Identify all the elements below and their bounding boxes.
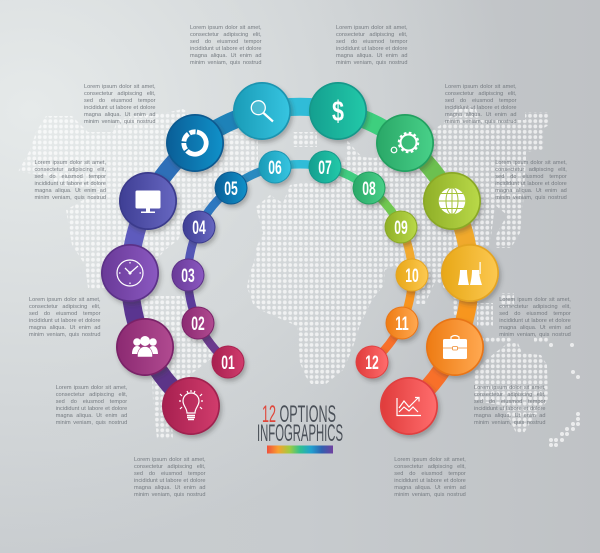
text block: lower left: magna aliqua. Ut enim ad (29, 325, 100, 331)
text block: top right: Lorem ipsum dolor sit amet, (336, 25, 408, 31)
text block: middle right: consectetur adipiscing elit, (495, 167, 567, 173)
map: Eurasia and Africa (247, 106, 549, 384)
text block: lower right: magna aliqua. Ut enim ad (499, 325, 571, 331)
text block: bottom right inner: incididunt ut labore et dolore (474, 406, 546, 412)
text block: lower left: consectetur adipiscing elit, (29, 304, 100, 310)
node: monitor (119, 172, 177, 230)
icon: dollar sign: $ (332, 96, 344, 128)
number node 05 (214, 172, 248, 204)
text block: top right: magna aliqua. Ut enim ad (336, 53, 408, 59)
text block: upper right: incididunt ut labore et dolore (445, 105, 516, 111)
text block: upper left: consectetur adipiscing elit, (84, 91, 156, 97)
map: South America (143, 296, 212, 439)
text block: upper right (445, 84, 516, 125)
text block: upper right: Lorem ipsum dolor sit amet, (445, 84, 516, 90)
text block: upper right: consectetur adipiscing elit, (445, 91, 516, 97)
text block: bottom right: magna aliqua. Ut enim ad (394, 484, 466, 490)
dotted world map (18, 106, 580, 447)
node: globe (423, 172, 481, 230)
text block: upper left (84, 84, 156, 125)
outer ring connectors (130, 107, 470, 406)
number node 06 (258, 150, 292, 184)
text block: middle right: incididunt ut labore et dolore (495, 181, 567, 187)
number node 09: 09 (394, 217, 408, 239)
map: New Zealand and small islands (549, 343, 580, 447)
number node 10 (396, 258, 428, 292)
text block: lower right: Lorem ipsum dolor sit amet, (499, 297, 571, 303)
node: line chart (380, 377, 438, 435)
text block: lower right (499, 297, 571, 338)
text block: middle left: magna aliqua. Ut enim ad (34, 188, 106, 194)
text block: bottom left inner: magna aliqua. Ut enim ad (56, 413, 127, 419)
icon: line chart (397, 398, 421, 416)
text block: top left: Lorem ipsum dolor sit amet, (190, 25, 262, 31)
number node 08: 08 (362, 178, 376, 200)
number node 07 (308, 150, 342, 184)
text block: top right: minim veniam, quis nostrud (336, 60, 408, 66)
text block: middle left: incididunt ut labore et dolore (34, 181, 106, 187)
text block: bottom left: sed do eiusmod tempor (134, 470, 206, 476)
text block: bottom left: minim veniam, quis nostrud (134, 492, 206, 498)
node: clock (101, 244, 159, 302)
text block: bottom left: consectetur adipiscing elit, (134, 464, 206, 470)
text block: bottom right inner: consectetur adipiscing elit, (474, 392, 546, 398)
text block: bottom right inner: magna aliqua. Ut enim ad (474, 413, 546, 419)
number node 02: 02 (191, 313, 205, 335)
text block: middle left: minim veniam, quis nostrud (34, 195, 106, 201)
text block: bottom left inner: consectetur adipiscing elit, (56, 392, 127, 398)
map: North America (18, 109, 258, 290)
icon: clock (117, 260, 143, 286)
text block: middle right: magna aliqua. Ut enim ad (495, 188, 567, 194)
text block: top right (336, 25, 408, 66)
number node 03 (172, 258, 204, 292)
number node 02 (182, 306, 214, 340)
icon: gears (391, 133, 418, 153)
text block: middle right: sed do eiusmod tempor (495, 174, 567, 180)
text block: top left: magna aliqua. Ut enim ad (190, 53, 262, 59)
number node 03: 03 (181, 265, 195, 287)
text block: bottom left: incididunt ut labore et dolore (134, 478, 206, 484)
title line: 12 OPTIONS: 12 OPTIONS (262, 401, 336, 428)
number node 11 (386, 306, 418, 340)
number node 01: 01 (221, 352, 235, 374)
text block: bottom left (134, 456, 206, 498)
text block: bottom right: incididunt ut labore et dolore (394, 478, 466, 484)
text block: lower right: consectetur adipiscing elit, (499, 304, 571, 310)
number node 12: 12 (365, 352, 379, 374)
text block: lower left: sed do eiusmod tempor (29, 311, 100, 317)
text block: bottom left inner: incididunt ut labore et dolore (56, 406, 127, 412)
text block: lower left (29, 297, 100, 338)
text block: middle right: Lorem ipsum dolor sit amet, (495, 160, 567, 166)
text block: top right: consectetur adipiscing elit, (336, 32, 408, 38)
text block: bottom right inner (474, 385, 546, 426)
text block: top left: sed do eiusmod tempor (190, 39, 262, 45)
title (257, 401, 343, 447)
icon: briefcase (443, 336, 467, 359)
node: briefcase (426, 318, 484, 376)
number node 12 (356, 346, 388, 378)
text block: bottom right: consectetur adipiscing elit, (394, 464, 466, 470)
node: light bulb (162, 377, 220, 435)
text block: top left (190, 25, 262, 66)
text block: upper left: magna aliqua. Ut enim ad (84, 112, 156, 118)
text block: upper right: magna aliqua. Ut enim ad (445, 112, 516, 118)
text block: top left: minim veniam, quis nostrud (190, 60, 262, 66)
icon: magnifier (251, 101, 273, 122)
number node 08 (352, 172, 386, 204)
text block: lower left: minim veniam, quis nostrud (29, 332, 100, 338)
text block: top left: incididunt ut labore et dolore (190, 46, 262, 52)
node: donut chart (166, 114, 224, 172)
number node 10: 10 (405, 265, 419, 287)
text block: bottom left inner (56, 385, 127, 426)
text block: middle left: consectetur adipiscing elit, (34, 167, 106, 173)
node: factory (441, 244, 499, 302)
inner ring connectors (188, 164, 412, 362)
text block: bottom right: Lorem ipsum dolor sit amet, (394, 456, 466, 462)
number node 09 (384, 210, 418, 244)
icon: people (132, 336, 158, 357)
text block: middle right (495, 160, 567, 201)
text block: bottom left inner: minim veniam, quis nostrud (56, 420, 127, 426)
number node 07: 07 (318, 157, 332, 179)
text block: bottom left inner: sed do eiusmod tempor (56, 399, 127, 405)
text: INFOGRAPHICS (257, 420, 343, 447)
text block: bottom right (394, 456, 466, 498)
map: Australia (474, 343, 548, 433)
node: gears (376, 114, 434, 172)
text block: bottom right inner: sed do eiusmod tempor (474, 399, 546, 405)
text block: middle right: minim veniam, quis nostrud (495, 195, 567, 201)
text block: bottom right: sed do eiusmod tempor (394, 470, 466, 476)
text block: bottom right inner: Lorem ipsum dolor sit amet, (474, 385, 546, 391)
text block: top right: sed do eiusmod tempor (336, 39, 408, 45)
node: magnifier (233, 82, 291, 140)
icon: donut chart (181, 129, 209, 157)
text block: upper left: minim veniam, quis nostrud (84, 119, 156, 125)
text block: upper right: sed do eiusmod tempor (445, 98, 516, 104)
icon: monitor (136, 190, 160, 213)
text block: bottom right inner: minim veniam, quis nostrud (474, 420, 546, 426)
number node 01 (212, 346, 244, 378)
text block: bottom left: magna aliqua. Ut enim ad (134, 484, 206, 490)
number node 04 (182, 210, 216, 244)
text block: upper left: Lorem ipsum dolor sit amet, (84, 84, 156, 90)
number node 05: 05 (224, 178, 238, 200)
text block: bottom left: Lorem ipsum dolor sit amet, (134, 456, 206, 462)
text block: upper left: incididunt ut labore et dolore (84, 105, 156, 111)
text block: upper right: minim veniam, quis nostrud (445, 119, 516, 125)
map: northern island (293, 132, 317, 147)
node: people (116, 318, 174, 376)
number node 06: 06 (268, 157, 282, 179)
text block: lower right: incididunt ut labore et dolore (499, 318, 571, 324)
map: south-east Asia islands (477, 303, 493, 326)
icon: light bulb (179, 390, 203, 420)
text block: lower left: incididunt ut labore et dolore (29, 318, 100, 324)
node: dollar (309, 82, 367, 140)
text block: bottom left inner: Lorem ipsum dolor sit amet, (56, 385, 127, 391)
text block: middle left: sed do eiusmod tempor (34, 174, 106, 180)
number node 11: 11 (395, 313, 409, 335)
text block: upper left: sed do eiusmod tempor (84, 98, 156, 104)
text block: middle left (34, 160, 106, 201)
text block: lower right: minim veniam, quis nostrud (499, 332, 571, 338)
text block: bottom right: minim veniam, quis nostrud (394, 492, 466, 498)
icon: factory (458, 262, 482, 285)
icon: globe (439, 188, 465, 214)
text block: middle left: Lorem ipsum dolor sit amet, (34, 160, 106, 166)
rainbow bar (267, 446, 333, 454)
text block: top left: consectetur adipiscing elit, (190, 32, 262, 38)
text block: top right: incididunt ut labore et dolore (336, 46, 408, 52)
number node 04: 04 (192, 217, 206, 239)
text block: lower right: sed do eiusmod tempor (499, 311, 571, 317)
text block: lower left: Lorem ipsum dolor sit amet, (29, 297, 100, 303)
